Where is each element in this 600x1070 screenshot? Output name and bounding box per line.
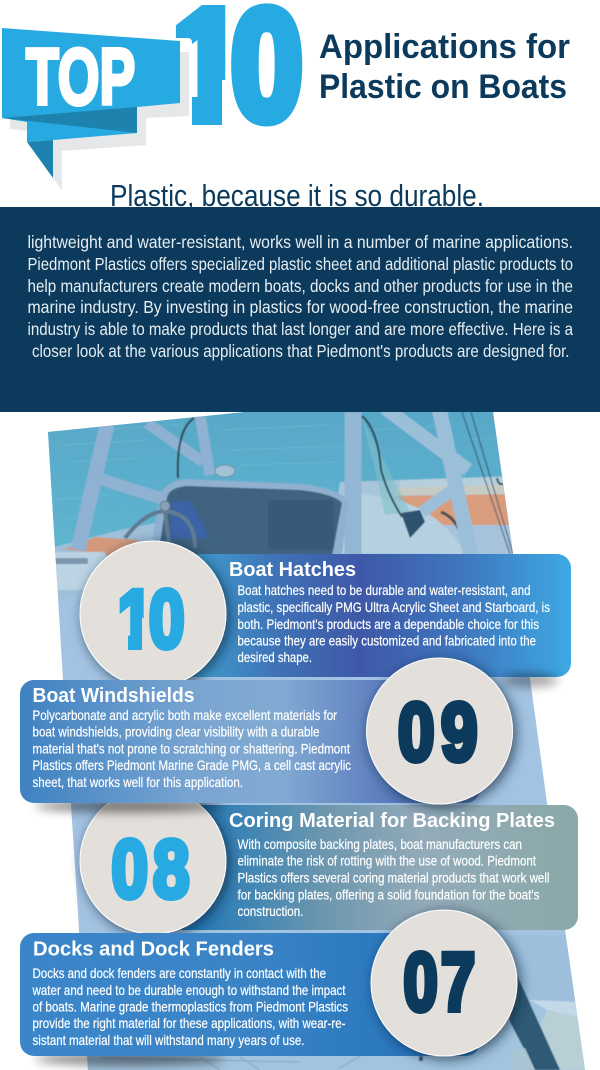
circle number 09: 09 (398, 686, 477, 778)
title: Plastic on Boats (319, 68, 567, 106)
body text (32, 966, 348, 1048)
body text: for backing plates, offering a solid foundation for the boat's (238, 887, 540, 902)
body text: water and need to be durable enough to withstand the impact (32, 983, 346, 998)
circle number 10: 0 (149, 572, 185, 665)
panel: 08 Coring Material (80, 788, 578, 934)
subtitle line: Plastic, because it is so durable. (110, 178, 484, 213)
background photo: boat (40, 405, 600, 1070)
wheel (125, 511, 195, 548)
body text: eliminate the risk of rotting with the use of wood. Piedmont (238, 854, 536, 869)
body text: provide the right material for these applications, with wear-re- (32, 1016, 346, 1031)
panel: 10 Boat Hatches (80, 541, 571, 687)
circle number 07: 07 (404, 936, 475, 1028)
circle number 09 (366, 658, 512, 804)
TOP label: TOP (26, 32, 135, 122)
title: Applications for (319, 28, 570, 66)
body text: of boats. Marine grade thermoplastics from Piedmont Plastics (32, 1000, 348, 1015)
body text (238, 837, 550, 919)
lower photo (60, 935, 600, 1070)
body text: Plastics offers Piedmont Marine Grade PMG, a cell cast acrylic (32, 758, 351, 773)
console (150, 479, 348, 556)
heading: Boat Hatches (229, 559, 356, 581)
body text: Plastics offers several coring material products that work well (238, 871, 550, 886)
body text: Boat hatches need to be durable and water-resistant, and (238, 583, 530, 598)
circle number 08 (80, 788, 226, 934)
body text: With composite backing plates, boat manufacturers can (238, 837, 522, 852)
lower-left deck (50, 520, 170, 600)
title (319, 28, 570, 106)
windscreen (362, 418, 410, 515)
panel: 09 Boat Windshields (20, 658, 512, 812)
heading: Boat Windshields (32, 685, 194, 707)
panel: 07 Docks and Dock Fenders (20, 910, 517, 1065)
body text: Polycarbonate and acrylic both make excellent materials for (32, 708, 337, 723)
circle number 07 (371, 910, 517, 1056)
banner: TOP ribbon (2, 28, 189, 190)
circle number 10 (80, 541, 226, 687)
body text: sheet, that works well for this application. (32, 775, 243, 790)
heading: Coring Material for Backing Plates (229, 810, 555, 832)
body text: sistant material that will withstand many years of use. (32, 1033, 304, 1048)
body text: desired shape. (238, 650, 312, 665)
intro band (0, 207, 600, 412)
circle number 10: 1 (118, 572, 153, 665)
body text: construction. (238, 904, 304, 919)
body text: Docks and dock fenders are constantly in contact with the (32, 966, 326, 981)
tubes right (353, 408, 471, 556)
body text: material that's not prone to scratching or shattering. Piedmont (32, 741, 350, 756)
circle number 08: 08 (112, 823, 189, 915)
body text (32, 708, 351, 790)
heading: Docks and Dock Fenders (33, 939, 274, 961)
body text: because they are easily customized and fabricated into the (238, 634, 536, 648)
tubes left (78, 415, 210, 550)
deck right (338, 480, 435, 502)
hull (340, 490, 466, 554)
body text (238, 583, 550, 665)
banner: big 10 (160, 0, 303, 153)
body text: both. Piedmont's products are a dependable choice for this (238, 617, 539, 632)
body text: boat windshields, providing clear visibility with a durable (32, 725, 320, 740)
intro text (28, 232, 573, 361)
